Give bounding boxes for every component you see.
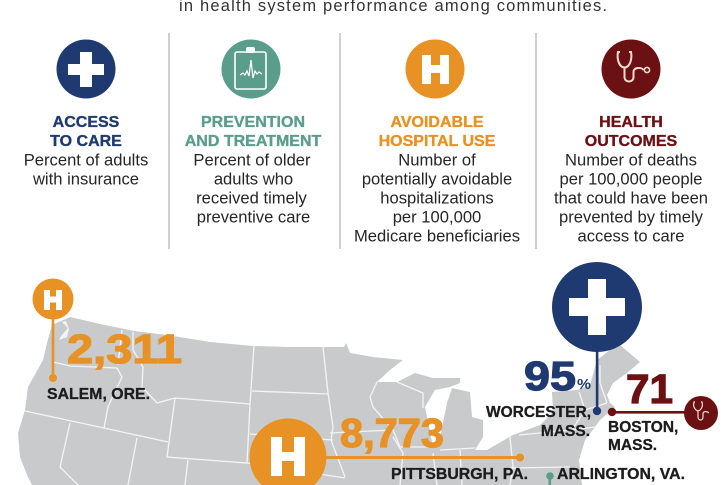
heading: prevention and treatment: AND TREATMENT xyxy=(185,133,322,150)
description: prevention and treatment: Percent of older xyxy=(193,150,311,170)
panel: avoidable hospital use xyxy=(354,40,520,246)
value: 95%: 95 xyxy=(524,353,576,399)
description: avoidable hospital use: Number of xyxy=(398,150,476,170)
description: avoidable hospital use: per 100,000 xyxy=(393,208,481,226)
icon: location pin xyxy=(546,472,554,485)
description: avoidable hospital use: Medicare beneficiaries xyxy=(354,226,520,246)
percent sign: % xyxy=(577,376,591,393)
icon: hospital pin xyxy=(32,278,74,382)
heading: access to care: ACCESS xyxy=(53,114,120,131)
description: health outcomes: per 100,000 people xyxy=(559,170,703,188)
description: avoidable hospital use: hospitalizations xyxy=(380,188,494,208)
value: 71: 71 xyxy=(626,366,673,412)
description: prevention and treatment: adults who xyxy=(214,170,293,188)
label: Pittsburgh, Pa.: PITTSBURGH, PA. xyxy=(391,466,528,483)
label: Worcester, Mass.: MASS. xyxy=(541,423,590,440)
heading: health outcomes: HEALTH xyxy=(599,114,663,131)
map: United States xyxy=(18,317,640,485)
panel: access to care xyxy=(24,40,148,188)
label: Boston, Mass.: MASS. xyxy=(608,437,657,454)
icon: medical cross xyxy=(56,40,116,98)
description: access to care: Percent of adults xyxy=(24,150,148,170)
panel: health outcomes xyxy=(554,40,708,246)
label: Salem, Ore.: SALEM, ORE. xyxy=(47,386,150,403)
panel: prevention and treatment xyxy=(185,40,322,226)
description: health outcomes: prevented by timely xyxy=(559,208,704,226)
heading: access to care: TO CARE xyxy=(50,133,122,150)
icon: hospital pin large xyxy=(250,418,524,485)
callout: Pittsburgh, Pa. xyxy=(250,410,528,485)
heading: avoidable hospital use: AVOIDABLE xyxy=(390,114,484,131)
description: health outcomes: that could have been xyxy=(554,188,708,208)
icon: hospital H xyxy=(406,40,464,98)
icon: medical cross pin xyxy=(552,262,642,415)
icon: stethoscope pin xyxy=(608,396,718,430)
value: 2,311: 2,311 xyxy=(67,326,182,372)
callout: Arlington, Va. xyxy=(546,466,685,485)
label: Arlington, Va.: ARLINGTON, VA. xyxy=(557,466,685,483)
callout: Salem, Ore. xyxy=(32,278,182,403)
description: health outcomes: Number of deaths xyxy=(565,150,697,170)
callout: Worcester, Mass. xyxy=(486,262,642,440)
icon: clipboard with pulse xyxy=(222,40,280,98)
description: avoidable hospital use: potentially avoidable xyxy=(362,170,512,188)
callout: Boston, Mass. xyxy=(608,366,718,454)
label: Worcester, Mass.: WORCESTER, xyxy=(486,404,591,421)
label: Boston, Mass.: BOSTON, xyxy=(608,419,678,436)
icon: stethoscope xyxy=(602,40,660,98)
heading: avoidable hospital use: HOSPITAL USE xyxy=(379,133,496,150)
description: health outcomes: access to care xyxy=(578,226,684,246)
description: access to care: with insurance xyxy=(32,170,139,188)
heading: prevention and treatment: PREVENTION xyxy=(201,114,305,131)
description: prevention and treatment: received timely xyxy=(196,188,308,208)
heading: health outcomes: OUTCOMES xyxy=(585,133,678,150)
value: 8,773: 8,773 xyxy=(340,410,444,456)
description: prevention and treatment: preventive care xyxy=(197,208,310,226)
